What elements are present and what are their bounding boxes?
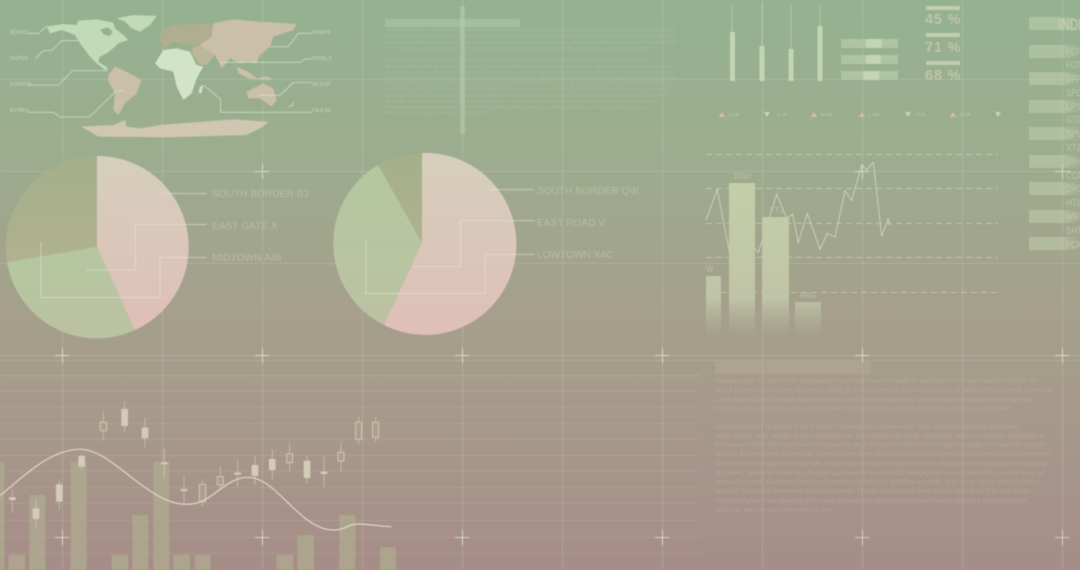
ticker row: 4.148 (728, 112, 740, 117)
ticker row: 4.148 (959, 112, 971, 117)
pie chart: right: EAST ROAD V (537, 218, 605, 229)
world map with callouts: FHDP58 (10, 82, 31, 88)
world map with callouts: 0K3IXP (312, 82, 331, 88)
ticker row: -2.35 (915, 112, 926, 117)
pie chart: left: MIDTOWN A46 (212, 253, 282, 264)
percentage stats: 68 % (925, 68, 961, 84)
text block: top centre: Adequate protection: the analysis of how to protect a household from unforeseen risks. These risks can be divided into the following: (385, 58, 647, 64)
world map with callouts (10, 15, 332, 137)
text block: top centre: worth is a person's balance sheet, calculated by adding up all assets under that person's control, minus all liabilities of the household, at one point (384, 34, 675, 40)
text block: top centre: Since insurance also enjoys some tax benefits, utilizing insurance investment products may be a critical piece of the overall investment planning. (385, 81, 675, 87)
pie chart: left (6, 156, 309, 338)
stacked progress bars (841, 39, 898, 81)
bar and line chart: right: YT3 (769, 206, 784, 215)
text block: bottom right: which it can later save you money in the long term. (714, 505, 832, 514)
text block: top centre: which it can later save you money in the long term. (384, 111, 488, 117)
text block: top centre: when and how much. Government gives many incentives in the form of tax deductions and credits, which can be used to reduce the lifetime (384, 93, 668, 99)
ticker row: -0.18 (776, 112, 787, 117)
text block: bottom right (714, 362, 1052, 514)
world map with callouts: 5K0SL3 (312, 56, 332, 62)
text block: top centre: Financial position is concerned with understanding the personal resources available by examining net worth and household cash flow. Net (385, 28, 675, 34)
world map with callouts: BD8XQ (10, 30, 29, 36)
pie chart: right: SOUTH BORDER QW (537, 186, 640, 197)
text block: top centre: insurance. Business owners, professionals, athletes and entertainers require specialized insurance professionals to adequately protect themselves. (385, 75, 677, 81)
ticker row (719, 112, 1001, 117)
world map with callouts: FBJL85 (312, 108, 331, 114)
text block: top centre: an insurance contract. Determining how much insurance to get, at the most cost effective terms requires knowledge of the market for personal (385, 70, 670, 76)
bar and line chart: right: DSH (734, 172, 751, 181)
bar and line chart: right (706, 154, 998, 338)
world map with callouts: HXDP9 (312, 30, 330, 36)
index list (1029, 17, 1080, 251)
pie chart: right: LOWTOWN X4C (537, 250, 613, 261)
text block: top centre: tax burden. Most modern governments use a progressive tax. Typically, as one's income grows, a higher marginal rate of tax must be paid. (385, 99, 657, 105)
candlestick sticks: top right (730, 2, 822, 81)
candlestick chart: bottom left (0, 402, 396, 570)
percentage stats: 71 % (925, 40, 961, 56)
ticker row: 0.348 (821, 112, 833, 117)
text block: top centre: Tax planning: typically the income tax is the single largest expense in a household. Managing taxes is not a question of if you will pay taxes, but (385, 87, 670, 93)
text block: top centre (384, 19, 677, 117)
world map with callouts: BY8IK5 (10, 108, 29, 114)
world map with callouts: G4PE5 (10, 56, 28, 62)
bar and line chart: right: W (706, 265, 714, 274)
pie chart: left: EAST GATE X (212, 221, 278, 232)
text block: top centre: From this analysis, the financial planner can determine to what degree and in what time the personal goals can be accomplished. (385, 46, 653, 52)
pie chart: left: SOUTH BORDER B3 (212, 189, 309, 200)
pie chart: right (333, 153, 640, 335)
percentage stats: 45 % (925, 12, 961, 28)
text block: top centre: Understanding how to take advantage of the myriad tax breaks when planning one's personal finances can make a significant impact in (385, 105, 649, 111)
percentage stats (925, 6, 961, 84)
bar and line chart: right: H4G (800, 291, 816, 300)
ticker row: 1.008 (868, 112, 880, 117)
text block: top centre: in time. Household cash flow totals up all the expected sources of income within a year, minus all expected expenses within the same year. (385, 40, 677, 46)
text block: top centre: liability, property, death, disability, health and long term care. Some of these risks may be self-insurable, while most will require the purchase of (385, 64, 673, 70)
